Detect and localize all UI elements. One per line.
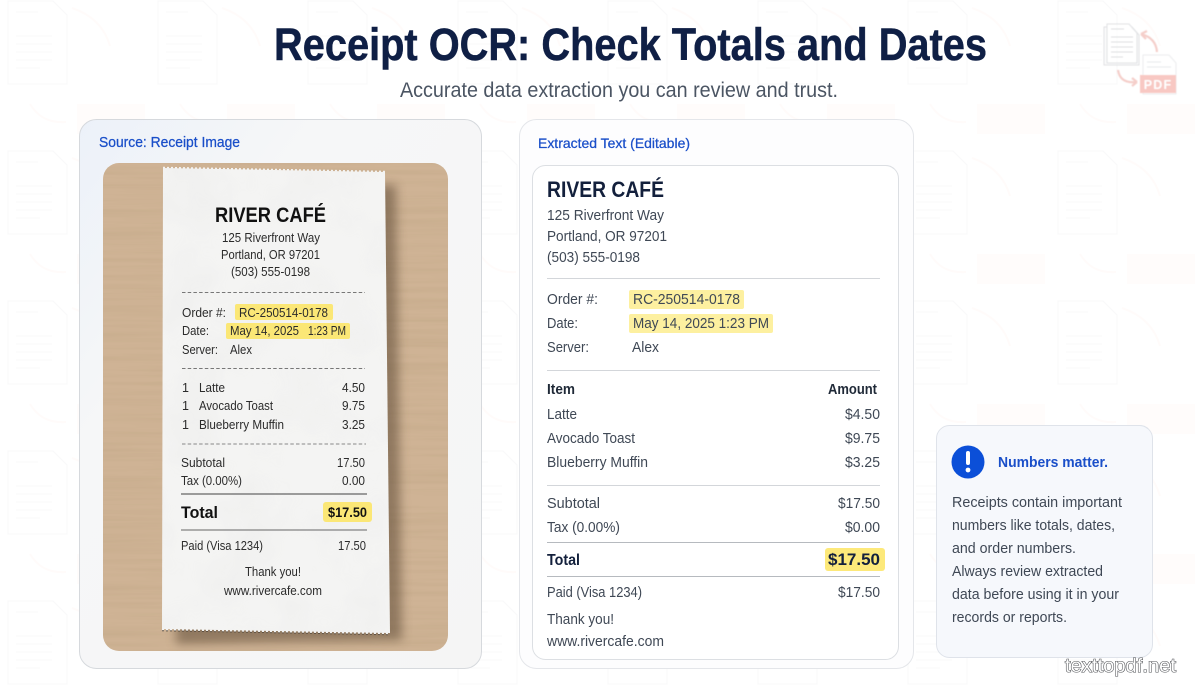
receipt line items: 4.50 xyxy=(342,381,365,395)
receipt footer xyxy=(223,565,322,598)
extracted totals: Subtotal xyxy=(547,496,600,512)
panel: extracted text xyxy=(520,120,914,668)
receipt address xyxy=(221,231,321,279)
callout body: Receipts contain important xyxy=(952,495,1122,511)
editable text card xyxy=(532,166,898,660)
receipt line items: Latte xyxy=(199,381,225,395)
receipt address: Portland, OR 97201 xyxy=(221,248,320,262)
extracted items table: Item xyxy=(547,382,575,398)
callout: numbers matter xyxy=(936,426,1152,658)
watermark: texttopdf.net xyxy=(1065,656,1177,677)
extracted order details: May 14, 2025 1:23 PM xyxy=(633,316,769,332)
extracted order details: Server: xyxy=(547,340,589,356)
receipt totals xyxy=(181,456,372,553)
extracted totals: $0.00 xyxy=(845,520,880,536)
extracted totals: $17.50 xyxy=(828,551,880,569)
receipt totals: Total xyxy=(181,503,218,522)
extracted order details: Date: xyxy=(547,316,578,332)
icon: document to PDF logo xyxy=(1104,24,1176,94)
receipt order details: Server: xyxy=(182,343,218,357)
receipt address: 125 Riverfront Way xyxy=(222,231,321,245)
panel heading: source: Source: Receipt Image xyxy=(99,135,240,151)
extracted address xyxy=(547,208,667,266)
receipt totals: 0.00 xyxy=(342,474,365,488)
extracted items table: $3.25 xyxy=(845,455,880,471)
extracted items table xyxy=(547,382,880,471)
receipt totals: Subtotal xyxy=(181,456,225,470)
callout body: Always review extracted xyxy=(952,564,1103,580)
extracted totals: $17.50 xyxy=(838,585,880,601)
extracted address: (503) 555-0198 xyxy=(547,250,640,266)
receipt order details: 1:23 PM xyxy=(308,324,346,338)
extracted totals: Tax (0.00%) xyxy=(547,520,620,536)
receipt paper xyxy=(162,168,390,634)
receipt content xyxy=(181,204,372,598)
receipt totals: 17.50 xyxy=(338,539,366,553)
extracted footer xyxy=(546,612,664,650)
receipt order details: Alex xyxy=(230,343,253,357)
callout body: and order numbers. xyxy=(952,541,1076,557)
extracted order details: RC-250514-0178 xyxy=(633,292,740,308)
receipt line items xyxy=(182,381,365,432)
extracted items table: $9.75 xyxy=(845,431,880,447)
receipt store name: RIVER CAFÉ xyxy=(215,204,326,227)
extracted totals: Total xyxy=(547,552,580,569)
receipt highlights xyxy=(226,304,350,339)
extracted order details xyxy=(547,292,769,356)
receipt address: (503) 555-0198 xyxy=(231,265,310,279)
extracted highlights xyxy=(629,290,773,333)
receipt order details: Order #: xyxy=(182,306,226,320)
receipt totals: 17.50 xyxy=(337,456,365,470)
icon: document to PDF logo: PDF xyxy=(1144,78,1172,92)
extracted items table: Blueberry Muffin xyxy=(547,455,648,471)
extracted totals: Paid (Visa 1234) xyxy=(547,585,642,601)
callout body: records or reports. xyxy=(952,610,1067,626)
callout body xyxy=(952,495,1122,626)
extracted items table: Latte xyxy=(547,407,577,423)
receipt order details xyxy=(182,306,346,357)
extracted totals: $17.50 xyxy=(838,496,880,512)
panel: source receipt image xyxy=(80,120,482,668)
icon: exclamation xyxy=(952,446,984,478)
subtitle: Accurate data extraction you can review and trust. xyxy=(400,79,838,102)
callout heading: Numbers matter. xyxy=(998,455,1108,471)
wood background photo xyxy=(103,163,448,651)
extracted address: Portland, OR 97201 xyxy=(547,229,667,245)
extracted footer: www.rivercafe.com xyxy=(546,634,664,650)
extracted totals xyxy=(547,496,885,601)
receipt line items: 3.25 xyxy=(342,418,365,432)
callout body: numbers like totals, dates, xyxy=(952,518,1115,534)
title: Receipt OCR: Check Totals and Dates xyxy=(274,19,987,70)
receipt line items: 1 xyxy=(182,418,189,432)
receipt line items: 1 xyxy=(182,399,189,413)
extracted items table: $4.50 xyxy=(845,407,880,423)
receipt order details: Date: xyxy=(182,324,209,338)
extracted order details: Order #: xyxy=(547,292,598,308)
extracted items table: Amount xyxy=(828,382,877,398)
extracted store name: RIVER CAFÉ xyxy=(547,177,664,202)
panel heading: extracted: Extracted Text (Editable) xyxy=(538,135,690,151)
receipt line items: Avocado Toast xyxy=(199,399,273,413)
receipt totals: $17.50 xyxy=(328,504,367,520)
receipt line items: Blueberry Muffin xyxy=(199,418,284,432)
receipt order details: RC-250514-0178 xyxy=(239,306,328,320)
receipt line items: 9.75 xyxy=(342,399,365,413)
extracted footer: Thank you! xyxy=(547,612,614,628)
receipt line items: 1 xyxy=(182,381,189,395)
callout body: data before using it in your xyxy=(952,587,1119,603)
receipt order details: May 14, 2025 xyxy=(230,324,299,338)
extracted address: 125 Riverfront Way xyxy=(547,208,665,224)
extracted order details: Alex xyxy=(632,340,660,356)
receipt footer: www.rivercafe.com xyxy=(223,584,322,598)
receipt totals: Paid (Visa 1234) xyxy=(181,539,263,553)
receipt totals: Tax (0.00%) xyxy=(181,474,242,488)
extracted items table: Avocado Toast xyxy=(547,431,635,447)
receipt footer: Thank you! xyxy=(245,565,301,579)
